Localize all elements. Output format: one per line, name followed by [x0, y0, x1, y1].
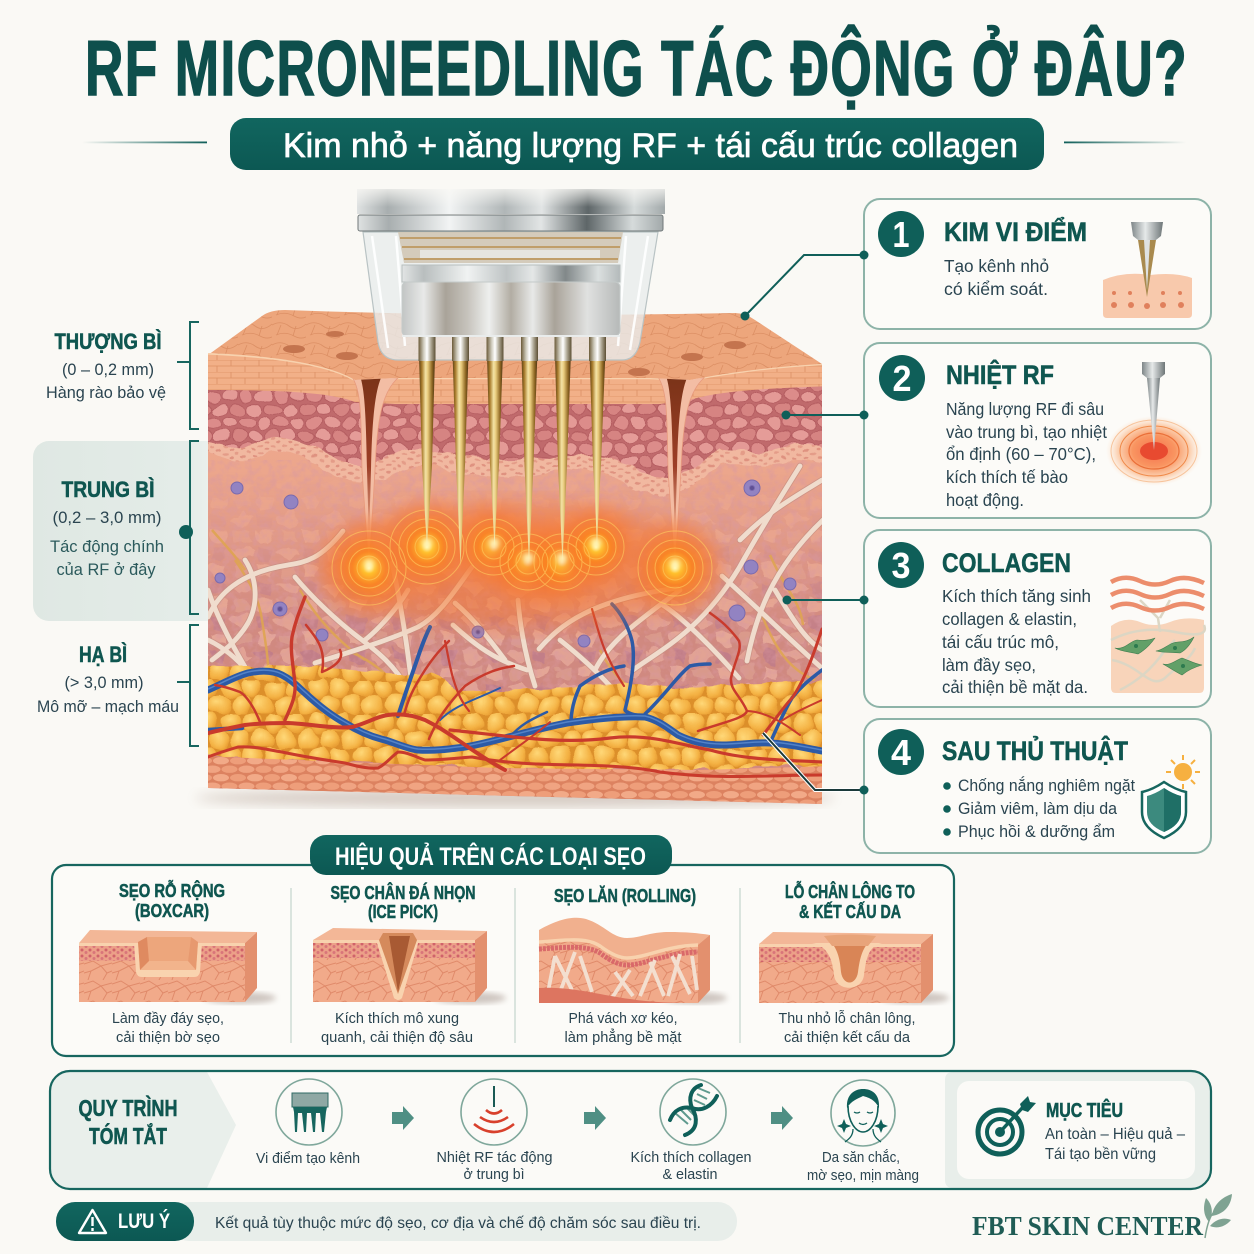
- note bar: LƯU Ý: [118, 1209, 170, 1233]
- goal card: An toàn – Hiệu quả –: [1045, 1126, 1185, 1143]
- goal background: [945, 1072, 1210, 1188]
- card 4: aftercare: Chống nắng nghiêm ngặt: [958, 776, 1135, 795]
- card 4: aftercare: [864, 719, 1211, 853]
- scar: boxcar: (BOXCAR): [135, 901, 209, 921]
- icon: sun: [1166, 755, 1200, 789]
- step 1: micro channel: Vi điểm tạo kênh: [256, 1151, 360, 1167]
- card 4: aftercare: Giảm viêm, làm dịu da: [958, 799, 1118, 818]
- step 1: micro channel: [256, 1079, 360, 1167]
- card 3: collagen: tái cấu trúc mô,: [942, 632, 1059, 652]
- card 2: RF heat: 2: [892, 358, 912, 399]
- arrow: [392, 1106, 414, 1130]
- vein highlights: [208, 670, 822, 750]
- layer label: hypodermis: (> 3,0 mm): [64, 673, 144, 692]
- step 3: DNA: & elastin: [662, 1167, 718, 1183]
- arteries: [208, 597, 822, 777]
- card 1: micro needle: Tạo kênh nhỏ: [944, 256, 1049, 276]
- goal card: MỤC TIÊU: [1046, 1098, 1123, 1122]
- connector lines: [740, 250, 868, 794]
- step 4: smooth face: [807, 1080, 919, 1184]
- arrow: [584, 1106, 606, 1130]
- card 2: RF heat: vào trung bì, tạo nhiệt: [946, 422, 1107, 442]
- hot needle tips: [364, 538, 680, 569]
- panel: process summary: [50, 1071, 1211, 1189]
- collagen fibres outline: [208, 466, 824, 690]
- subtitle banner: [82, 118, 1186, 170]
- collagen fibres: [208, 466, 824, 690]
- glass cup: [363, 232, 658, 360]
- card 1: micro needle: 1: [892, 214, 910, 255]
- step 4: smooth face: mờ sẹo, mịn màng: [807, 1168, 919, 1184]
- layer label: dermis: TRUNG BÌ: [62, 477, 154, 502]
- needle collars: [418, 337, 606, 361]
- card 1: micro needle: KIM VI ĐIỂM: [944, 216, 1087, 247]
- scar: ice pick: SẸO CHÂN ĐÁ NHỌN: [330, 882, 476, 903]
- scar: enlarged pore: [759, 881, 949, 1046]
- layer label: dermis: (0,2 – 3,0 mm): [52, 508, 162, 527]
- brand logo: [972, 1194, 1232, 1241]
- fat layer: [200, 666, 830, 770]
- layer label: hypodermis: HẠ BÌ: [79, 642, 127, 667]
- brand logo: FBT SKIN CENTER: [972, 1211, 1203, 1241]
- step 2: RF heat: Nhiệt RF tác động: [436, 1150, 552, 1166]
- card 3: collagen: COLLAGEN: [942, 548, 1071, 578]
- skin top surface: [208, 310, 822, 400]
- scar: boxcar: SẸO RỖ RỘNG: [119, 880, 225, 901]
- metal band: [358, 215, 663, 231]
- handpiece: [350, 183, 672, 566]
- fibroblast cells: [215, 480, 796, 647]
- card 2: RF heat: [864, 343, 1211, 518]
- panel: process summary: QUY TRÌNH: [78, 1094, 178, 1121]
- card 4: aftercare: SAU THỦ THUẬT: [942, 734, 1128, 766]
- scar: rolling: làm phẳng bề mặt: [564, 1028, 682, 1046]
- heading: scar types: [310, 835, 672, 875]
- icon: needle into skin: [1103, 222, 1192, 318]
- scar: boxcar: Làm đầy đáy sẹo,: [112, 1010, 224, 1027]
- card 3: collagen: Kích thích tăng sinh: [942, 586, 1091, 606]
- arrow: [771, 1106, 793, 1130]
- heading: scar types: HIỆU QUẢ TRÊN CÁC LOẠI SẸO: [335, 841, 646, 871]
- icon: heat rings: [1106, 362, 1202, 486]
- step 3: DNA: Kích thích collagen: [630, 1150, 752, 1166]
- goal card: Tái tạo bền vững: [1045, 1146, 1156, 1163]
- process label shape: [51, 1072, 236, 1188]
- icon: shield: [1142, 782, 1186, 838]
- inner gold rings: [398, 232, 623, 263]
- wavy basal band: [208, 436, 822, 497]
- card 2: RF heat: Năng lượng RF đi sâu: [946, 399, 1104, 419]
- follicle pits on surface: [283, 331, 746, 376]
- icon: warning: [79, 1210, 106, 1233]
- scar: ice pick: (ICE PICK): [368, 902, 438, 922]
- layer label: dermis: của RF ở đây: [56, 560, 156, 579]
- panel: process summary: TÓM TẮT: [89, 1122, 167, 1149]
- scar: rolling: Phá vách xơ kéo,: [568, 1010, 678, 1027]
- card 2: RF heat: kích thích tế bào: [946, 467, 1068, 487]
- card 4: aftercare: 4: [891, 732, 911, 773]
- layer label: hypodermis: [37, 625, 199, 746]
- skin cross-section block: [195, 183, 835, 810]
- microneedles: [418, 337, 606, 566]
- deep pebble layer: [208, 756, 822, 804]
- heat glow zones: [313, 491, 731, 627]
- step 2: RF heat: [436, 1079, 552, 1183]
- layer label: dermis highlight panel: [33, 441, 223, 621]
- step 4: smooth face: Da săn chắc,: [822, 1149, 900, 1166]
- card 2: RF heat: ổn định (60 – 70°C),: [946, 444, 1096, 464]
- card 3: collagen: 3: [892, 545, 910, 586]
- inner metal cylinders: [402, 265, 620, 282]
- right treatment channel: [658, 378, 705, 536]
- scar: rolling: [539, 885, 727, 1046]
- subtitle banner: Kim nhỏ + năng lượng RF + tái cấu trúc collagen: [283, 127, 1018, 165]
- note bar: [56, 1202, 737, 1241]
- scar: enlarged pore: cải thiện kết cấu da: [784, 1029, 911, 1046]
- icon: target: [978, 1096, 1036, 1154]
- card 3: collagen: cải thiện bề mặt da.: [942, 677, 1088, 697]
- card 2: RF heat: hoạt động.: [946, 490, 1024, 510]
- goal card: [957, 1081, 1195, 1179]
- scar: boxcar: cải thiện bờ sẹo: [116, 1029, 220, 1046]
- note bar: Kết quả tùy thuộc mức độ sẹo, cơ địa và chế độ chăm sóc sau điều trị.: [215, 1215, 701, 1232]
- layer label: hypodermis: Mô mỡ – mạch máu: [37, 697, 179, 716]
- scar: ice pick: Kích thích mô xung: [335, 1010, 459, 1027]
- scar: ice pick: [313, 882, 506, 1046]
- card 3: collagen: [864, 530, 1211, 707]
- card 4: aftercare: Phục hồi & dưỡng ẩm: [958, 822, 1115, 841]
- card 1: micro needle: có kiểm soát.: [944, 279, 1048, 299]
- scar: enlarged pore: & KẾT CẤU DA: [799, 901, 901, 922]
- stratum corneum band: [208, 355, 822, 404]
- step 3: DNA: [630, 1079, 752, 1183]
- scar: boxcar: [79, 880, 276, 1046]
- card 3: collagen: collagen & elastin,: [942, 609, 1077, 629]
- layer label: dermis: [50, 441, 199, 614]
- icon: collagen fibres and fibroblasts: [1111, 578, 1205, 693]
- veins: [208, 604, 822, 751]
- elastin fibres: [212, 530, 815, 688]
- epidermis cell layer: [200, 380, 830, 478]
- scar: ice pick: quanh, cải thiện độ sâu: [321, 1029, 473, 1046]
- layer label: epidermis: Hàng rào bảo vệ: [46, 383, 166, 402]
- scar: enlarged pore: Thu nhỏ lỗ chân lông,: [778, 1010, 916, 1027]
- scar: rolling: SẸO LĂN (ROLLING): [554, 885, 696, 906]
- left treatment channel: [352, 378, 398, 536]
- card 1: micro needle: [864, 199, 1211, 329]
- scar: enlarged pore: LỖ CHÂN LÔNG TO: [785, 881, 915, 902]
- layer label: epidermis: (0 – 0,2 mm): [62, 360, 154, 379]
- step 2: RF heat: ở trung bì: [464, 1167, 524, 1183]
- card 2: RF heat: NHIỆT RF: [946, 359, 1054, 390]
- layer label: epidermis: [46, 322, 199, 429]
- panel: scar types: [52, 835, 954, 1056]
- card 3: collagen: làm đầy sẹo,: [942, 655, 1036, 675]
- layer label: dermis: Tác động chính: [50, 537, 164, 556]
- skin front layers: [200, 340, 830, 810]
- layer label: epidermis: THƯỢNG BÌ: [54, 329, 162, 354]
